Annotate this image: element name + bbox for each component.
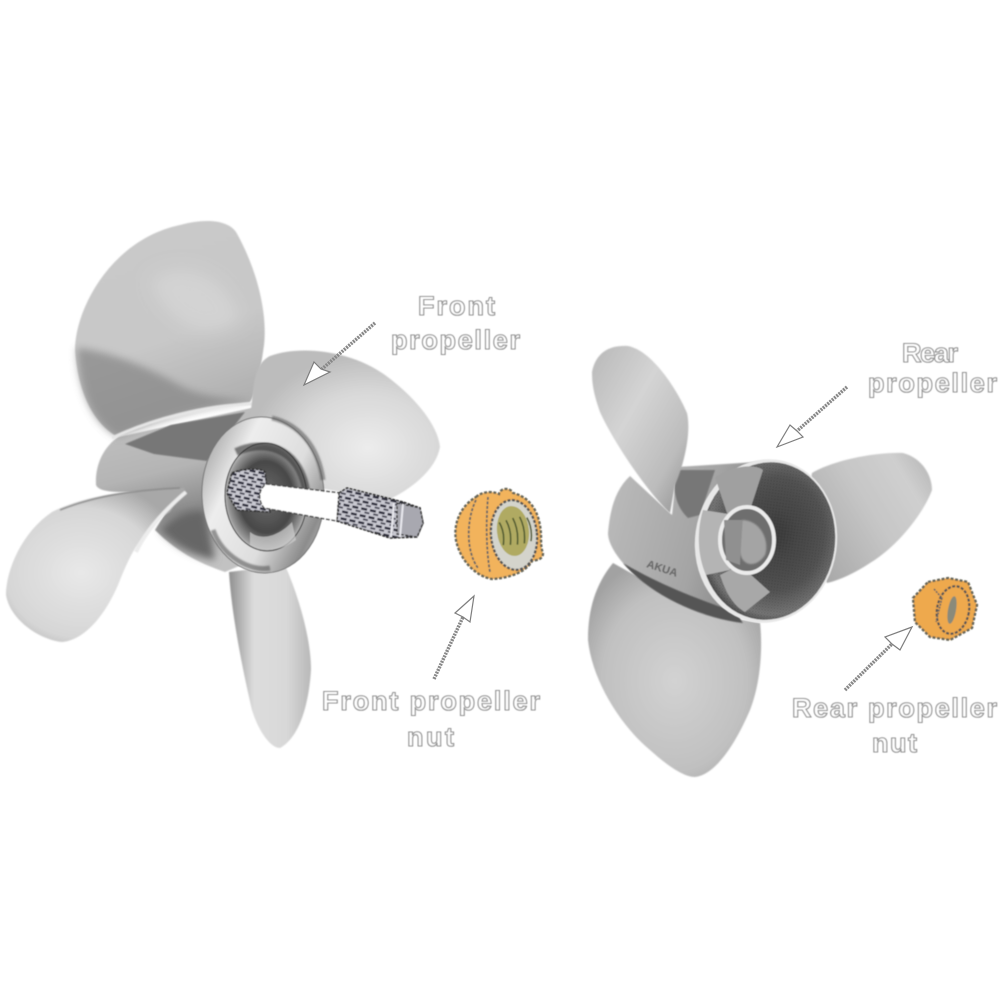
label: Rear propeller: propeller bbox=[868, 368, 997, 398]
ring: rear propeller opening bbox=[684, 450, 848, 632]
blade: front propeller top bbox=[75, 221, 265, 438]
label: Rear propeller: Rear bbox=[902, 338, 958, 368]
arrow: rear propeller bbox=[777, 387, 847, 447]
label: Front propeller: Front bbox=[418, 291, 495, 321]
ring: front propeller opening bbox=[198, 414, 328, 576]
front propeller bbox=[6, 221, 440, 748]
label: Front propeller nut: nut bbox=[407, 722, 454, 752]
blade: rear propeller bottom bbox=[588, 563, 761, 777]
shaft and splines bbox=[227, 469, 423, 538]
arrow: front propeller nut bbox=[434, 596, 474, 679]
arrow: front propeller bbox=[304, 323, 375, 385]
label: Front propeller: propeller bbox=[391, 325, 520, 355]
blade: front propeller left bbox=[6, 488, 186, 642]
rear propeller nut bbox=[913, 578, 977, 640]
rear propeller bbox=[588, 346, 932, 777]
label: Front propeller nut: Front propeller bbox=[322, 686, 540, 716]
front propeller nut bbox=[455, 489, 543, 579]
blade: rear propeller upper bbox=[592, 346, 688, 513]
label: Rear propeller nut: nut bbox=[872, 728, 917, 758]
hub engraving: AKUA bbox=[645, 558, 679, 580]
arrow: rear propeller nut bbox=[845, 627, 912, 690]
hub: front propeller body bbox=[96, 405, 300, 572]
blade: front propeller right bbox=[250, 350, 440, 500]
blade: rear propeller right bbox=[800, 453, 932, 583]
blade: front propeller bottom bbox=[229, 565, 311, 748]
label: Rear propeller nut: Rear propeller bbox=[792, 693, 997, 723]
hub: rear propeller body bbox=[608, 462, 757, 623]
